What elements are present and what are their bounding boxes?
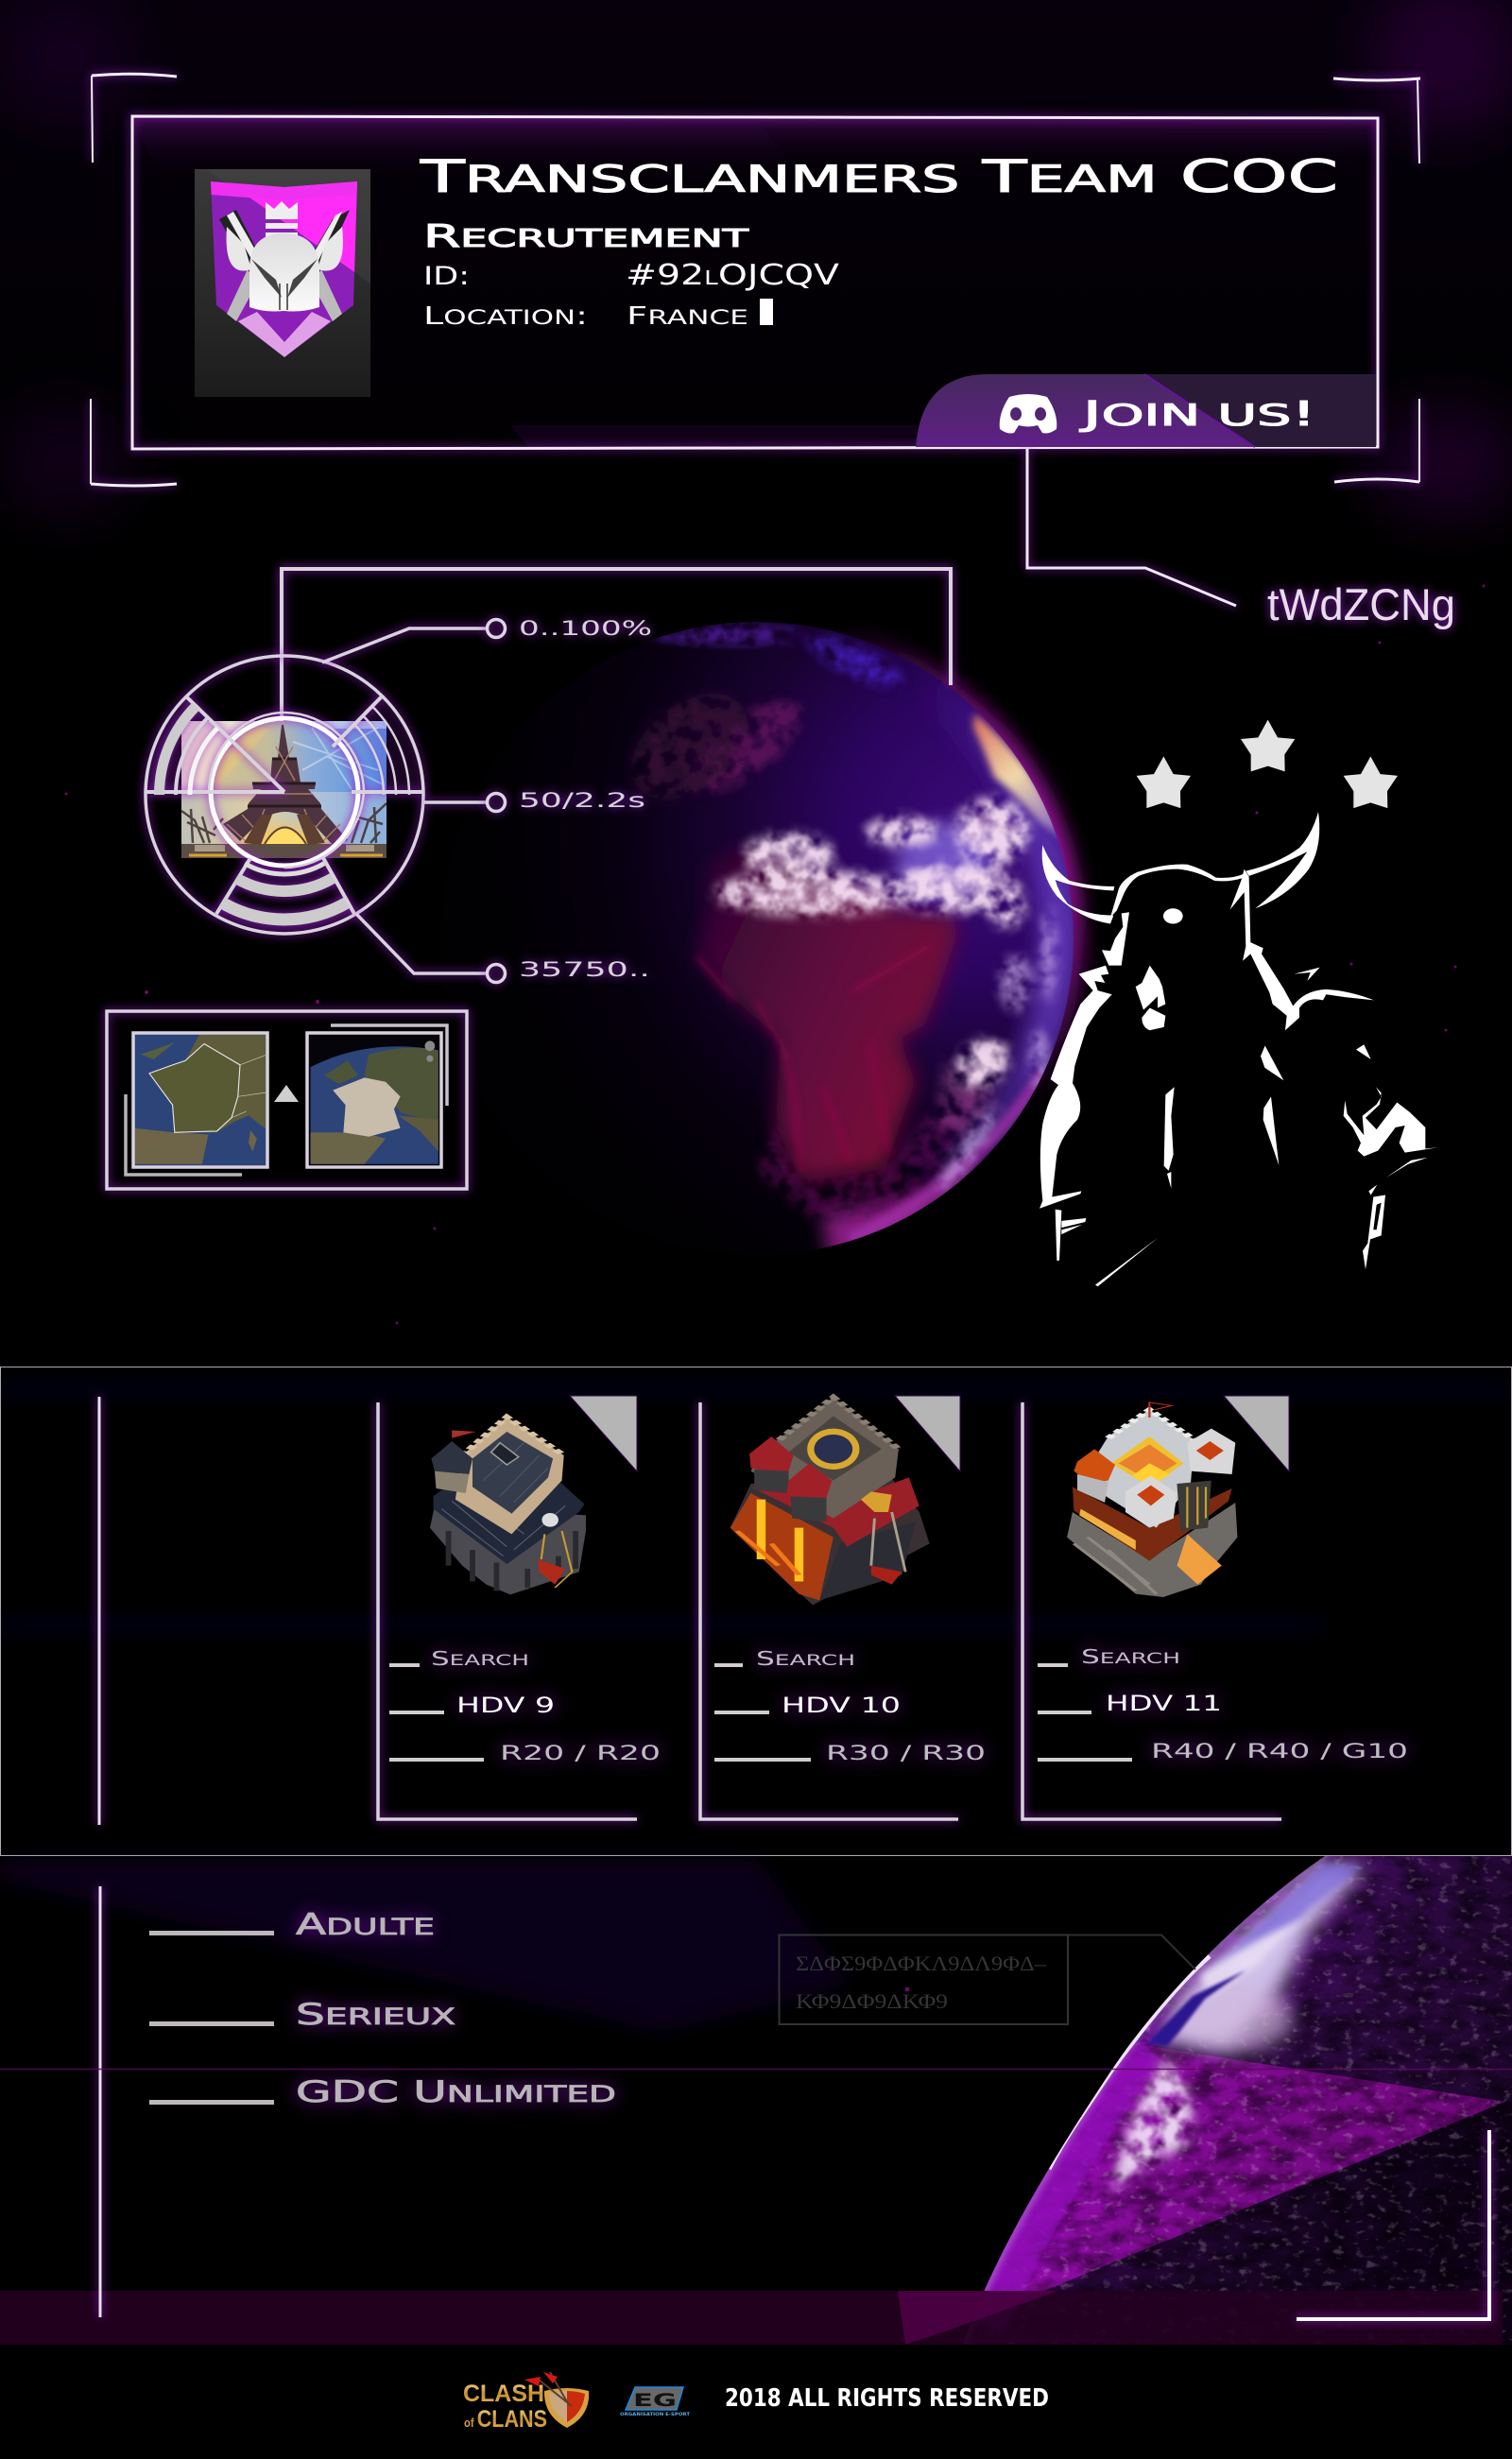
clan id label: ID:	[423, 262, 470, 291]
planet: horizon	[945, 1856, 1512, 2363]
magenta scan line	[0, 2068, 1512, 2070]
footer logo: clash of clans: of CLANS	[464, 2406, 547, 2433]
subtitle: recruitment: R ECRUTEMENT	[423, 217, 748, 254]
value: adulte: A DULTE	[296, 1908, 435, 1942]
footer logo: organisation	[620, 2387, 691, 2417]
dash	[714, 1663, 743, 1667]
label: search: S EARCH	[431, 1647, 529, 1670]
panel: HDV 10	[700, 1396, 986, 1819]
dash	[389, 1663, 420, 1667]
icon: discord	[1000, 394, 1057, 433]
dash	[1038, 1663, 1068, 1667]
map: france highlighted	[307, 1033, 441, 1167]
callout: trophies: 35750..	[519, 958, 650, 981]
frame line to planet	[282, 569, 951, 795]
label: requirement: R30 / R30	[826, 1742, 986, 1764]
frame border	[132, 116, 1378, 449]
invite code: tWdZCNg	[1267, 579, 1455, 629]
callout: rate	[424, 789, 645, 812]
ghost callout: ΣΔΦΣ9ΦΔΦΚΛ9ΔΛ9ΦΔ–	[796, 1952, 1047, 1975]
ghost callout	[779, 1935, 1195, 2024]
clan logo	[195, 169, 370, 397]
text cursor	[760, 299, 773, 325]
footer logo: organisation: EG	[633, 2390, 677, 2411]
bull silhouette with stars	[1040, 720, 1438, 1286]
accent band	[0, 2291, 1503, 2345]
ghost callout: ΚΦ9ΔΦ9ΔΚΦ9	[796, 1989, 948, 2013]
dash	[714, 1758, 811, 1762]
value: serieux	[149, 1998, 455, 2032]
corner bracket bottom right	[1297, 2130, 1489, 2319]
value: gdc unlimited: GDC U NLIMITED	[296, 2075, 616, 2109]
icon: shield	[211, 181, 357, 357]
label: level: HDV 9	[456, 1694, 555, 1718]
label: requirement: R20 / R20	[500, 1742, 661, 1764]
copyright: 2018 ALL RIGHTS RESERVED	[725, 2384, 1049, 2413]
value: gdc unlimited	[149, 2075, 616, 2109]
title: T RANSCLANMERS T EAM COC	[419, 151, 1338, 203]
map: france flat	[133, 1033, 267, 1167]
panel: france maps	[107, 1011, 467, 1189]
dash	[1038, 1711, 1091, 1714]
shield	[544, 2388, 589, 2428]
main header frame	[132, 116, 1378, 449]
icon: town hall 10	[730, 1397, 930, 1605]
join text: J OIN US !	[1079, 395, 1316, 434]
planet: earth	[440, 618, 1082, 1266]
dash	[389, 1711, 444, 1714]
footer logo: clash of clans	[463, 2372, 589, 2433]
corner brackets	[91, 74, 1420, 486]
value: serieux: S ERIEUX	[296, 1998, 455, 2032]
label: search: S EARCH	[756, 1647, 855, 1670]
label: search: S EARCH	[1081, 1645, 1180, 1668]
left accent line: values	[98, 1886, 102, 2317]
label: level: HDV 10	[782, 1694, 901, 1718]
location value: F RANCE	[627, 302, 748, 331]
connector to invite code	[1027, 449, 1236, 606]
triangle arrow	[274, 1085, 299, 1102]
join button	[916, 374, 1376, 447]
icon: town hall 9	[430, 1417, 586, 1594]
panel: HDV 9	[378, 1396, 661, 1819]
left accent line: town halls	[98, 1397, 100, 1825]
footer logo: organisation: ORGANISATION E-SPORT	[620, 2412, 691, 2417]
clan id value: #92 LOJCQV	[626, 259, 840, 292]
dash	[389, 1758, 484, 1762]
icon: town hall 11	[1067, 1401, 1237, 1597]
dash	[1038, 1758, 1132, 1762]
callout: percent	[322, 617, 652, 662]
callout: rate: 50/2.2s	[519, 789, 645, 812]
value: adulte	[149, 1908, 435, 1942]
panel: HDV 11	[1022, 1396, 1408, 1819]
section dividers	[0, 1367, 1512, 1856]
stars	[1137, 720, 1398, 808]
label: requirement: R40 / R40 / G10	[1151, 1740, 1408, 1763]
callout: percent: 0..100%	[519, 617, 652, 640]
radar diagram with eiffel tower	[146, 656, 423, 934]
footer logo: clash of clans: CLASH	[463, 2381, 544, 2407]
location label: L OCATION :	[423, 302, 588, 331]
label: level: HDV 11	[1106, 1693, 1222, 1716]
callout: trophies	[356, 914, 650, 983]
photo: eiffel tower	[181, 721, 387, 858]
dash	[714, 1711, 769, 1714]
